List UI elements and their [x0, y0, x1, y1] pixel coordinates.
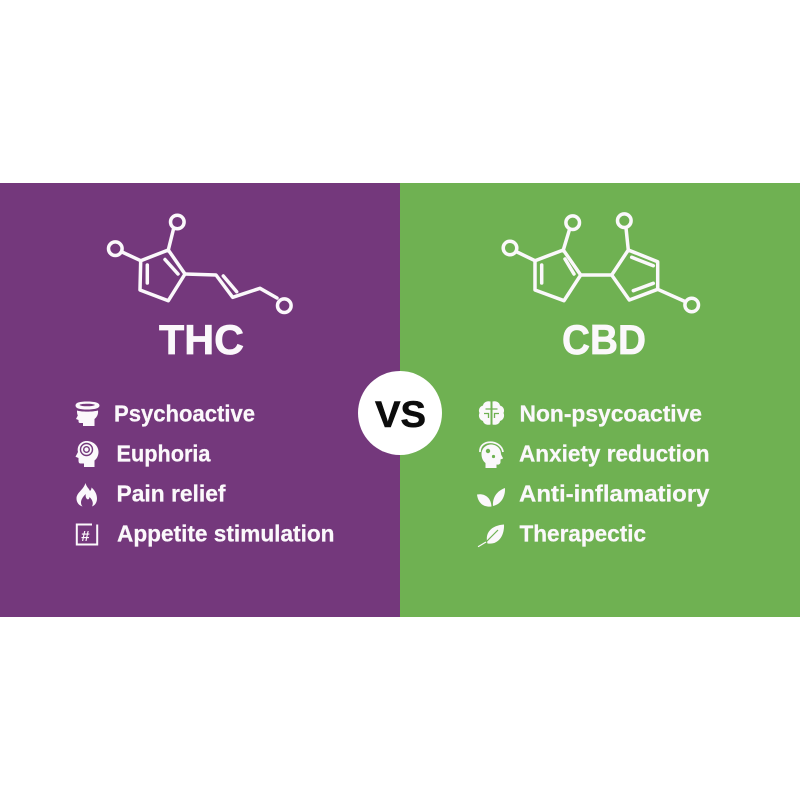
icon: CBD molecule	[503, 214, 698, 312]
panel: THC	[0, 183, 400, 617]
heading: THC: THC	[159, 316, 244, 363]
heading: CBD: CBD	[562, 316, 646, 363]
label: Psychoactive: Psychoactive	[114, 400, 255, 426]
icon: leaf	[478, 524, 504, 546]
badge: VS: VS	[375, 394, 426, 435]
icon: head with halo	[76, 402, 100, 426]
icon: two leaves	[477, 488, 505, 507]
badge: VS	[358, 371, 442, 455]
label: Euphoria: Euphoria	[116, 440, 211, 466]
label: Appetite stimulation: Appetite stimulation	[117, 520, 334, 546]
label: Anxiety reduction: Anxiety reduction	[519, 440, 710, 466]
icon: head with arcs	[480, 442, 503, 468]
icon: framed hash: #	[81, 528, 90, 545]
icon: THC molecule	[108, 215, 291, 313]
label: Anti-inflamatiory: Anti-inflamatiory	[519, 480, 710, 506]
label: Non-psycoactive: Non-psycoactive	[520, 400, 702, 426]
icon: framed hash	[77, 524, 97, 545]
icon: brain	[479, 401, 504, 425]
list: CBD effects	[477, 400, 710, 546]
panel: CBD	[400, 183, 800, 617]
list: THC effects	[76, 400, 334, 546]
label: Therapectic: Therapectic	[520, 520, 646, 546]
icon: flame	[76, 483, 97, 506]
icon: head with spiral	[76, 441, 98, 467]
label: Pain relief: Pain relief	[116, 480, 226, 506]
